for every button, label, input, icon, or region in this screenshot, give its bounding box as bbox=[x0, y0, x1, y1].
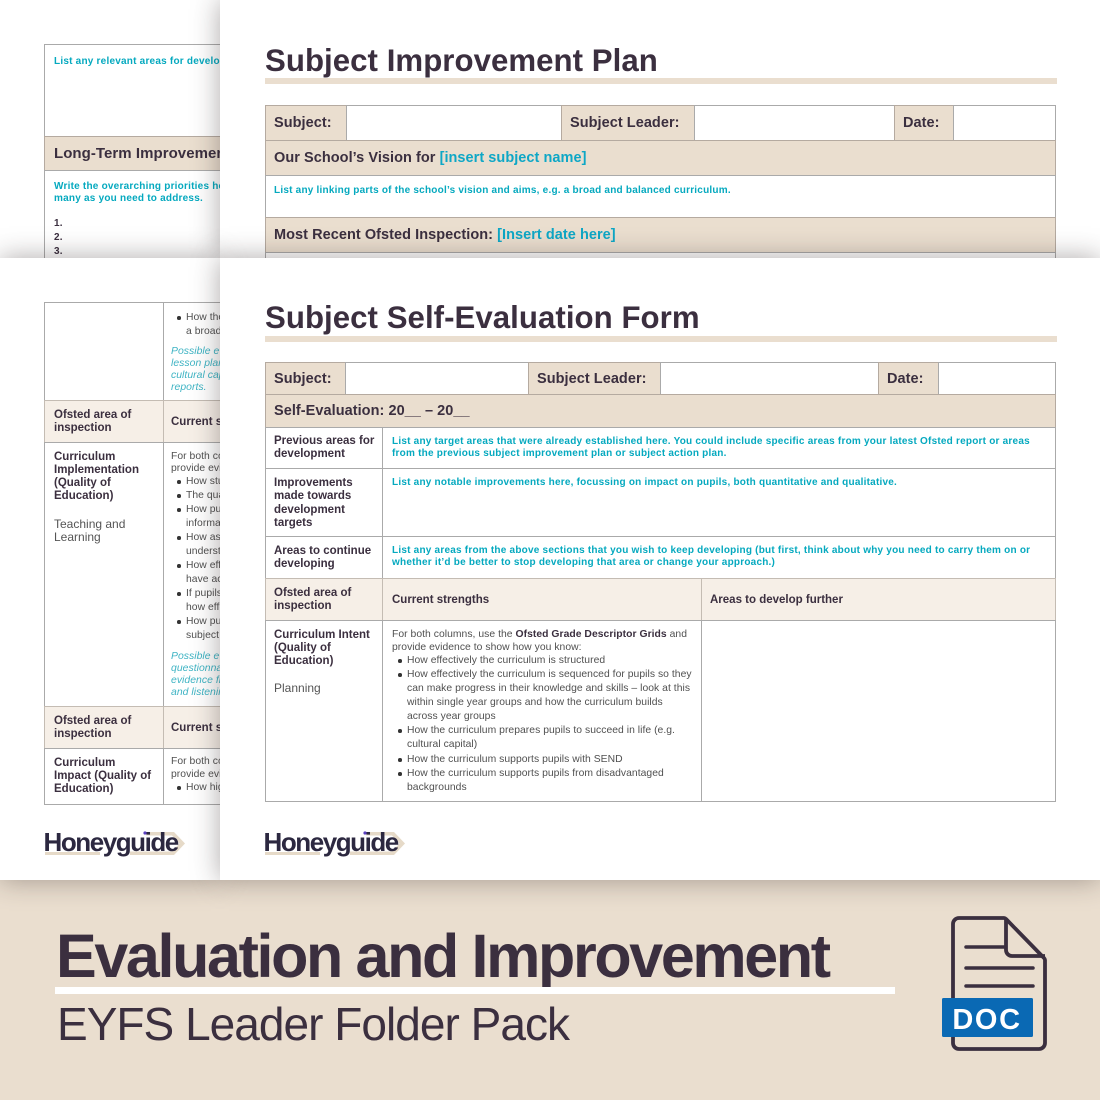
possible evidence note bbox=[171, 651, 220, 698]
guidance: curriculum intent: within single year groups and how the curriculum builds bbox=[407, 697, 663, 708]
title: Subject Self-Evaluation Form: Subject Self-Evaluation Form bbox=[265, 300, 700, 335]
field: Date: Date: bbox=[887, 371, 924, 387]
row: Curriculum Impact: Impact (Quality of bbox=[54, 770, 151, 782]
field: Subject Leader blank bbox=[694, 105, 895, 141]
field: Date blank bbox=[953, 105, 1056, 141]
row 1 content cell bbox=[163, 302, 463, 401]
header: Areas to develop further bbox=[701, 578, 1056, 621]
header: Current strengths (2) bbox=[163, 706, 463, 749]
header: Ofsted area of inspection (2): inspection bbox=[54, 728, 112, 740]
possible evidence note bbox=[171, 346, 220, 393]
icon: DOC file bbox=[942, 916, 1047, 1051]
priorities cell: many as you need to address. bbox=[54, 193, 203, 204]
panel: back page, improvement plan (top left) bbox=[0, 0, 300, 258]
header: Ofsted area of inspection (2) bbox=[44, 706, 164, 749]
panel: back page, self-evaluation continuation (left) bbox=[0, 258, 220, 880]
row: Curriculum Impact: Curriculum bbox=[54, 757, 115, 769]
guidance: curriculum intent: provide evidence to show how you know: bbox=[392, 642, 582, 653]
panel: front page, Subject Self-Evaluation Form bbox=[220, 258, 1100, 880]
header: Ofsted area of inspection: Ofsted area of bbox=[54, 409, 131, 421]
guidance: curriculum intent bbox=[382, 620, 702, 802]
field: Date: Date: bbox=[903, 115, 940, 131]
row: Curriculum Impact: Education) bbox=[54, 783, 113, 795]
label: Curriculum Intent: (Quality of bbox=[274, 642, 331, 654]
row: Self-Evaluation years bbox=[265, 394, 1056, 428]
heading row: Long-Term Improvement: Long-Term Improvement Priorities bbox=[54, 145, 300, 162]
row: Curriculum Implementation: Implementation bbox=[54, 464, 139, 476]
vision guidance text: List any linking parts of the school’s vision and aims, e.g. a broad and balanced curriculum. bbox=[274, 185, 731, 196]
field: Date bbox=[878, 362, 939, 395]
guidance: curriculum intent: For both columns, use the Ofsted Grade Descriptor Grids and bbox=[392, 629, 687, 640]
field: Subject Leader bbox=[528, 362, 661, 395]
implementation guidance: subject bbox=[186, 630, 219, 641]
guidance: improvements bbox=[382, 468, 1056, 537]
guidance: areas to continue: whether it’d be better to stop developing that area or change your approach.) bbox=[392, 557, 775, 568]
guidance: curriculum intent: cultural capital) bbox=[407, 739, 477, 750]
guidance: curriculum intent: How the curriculum supports pupils with SEND bbox=[407, 754, 623, 765]
title: Subject Improvement Plan: Subject Improvement Plan bbox=[265, 43, 658, 78]
guidance: curriculum intent: backgrounds bbox=[407, 782, 467, 793]
row: Self-Evaluation years: Self-Evaluation: 20__ – 20__ bbox=[274, 403, 470, 419]
target areas cell bbox=[44, 44, 344, 137]
row: Curriculum Implementation: Learning bbox=[54, 530, 101, 544]
label: Curriculum Intent bbox=[265, 620, 383, 802]
title underline bbox=[265, 78, 1057, 84]
guidance: curriculum intent: can make progress in their knowledge and skills – look at this bbox=[407, 683, 690, 694]
label: Areas to continue developing bbox=[265, 536, 383, 579]
label: Improvements made bbox=[265, 468, 383, 537]
row: Our School's Vision bbox=[265, 140, 1056, 176]
icon: DOC file: DOC bbox=[952, 1004, 1022, 1036]
label: Areas to continue developing: Areas to continue bbox=[274, 545, 371, 557]
heading: Evaluation and Improvement: Evaluation and Improvement bbox=[56, 922, 829, 990]
header: Ofsted area of inspection (2): Ofsted area of bbox=[54, 715, 131, 727]
label: Previous areas for development: development bbox=[274, 448, 345, 460]
label: Curriculum Intent: Curriculum Intent bbox=[274, 629, 370, 641]
subheading: EYFS Leader Folder Pack: EYFS Leader Folder Pack bbox=[57, 998, 569, 1050]
title underline bbox=[265, 336, 1057, 342]
row: Most Recent Ofsted Inspection bbox=[265, 217, 1056, 253]
label: Improvements made: targets bbox=[274, 517, 312, 529]
numbered list: 2. bbox=[54, 232, 63, 243]
label: Curriculum Intent: Education) bbox=[274, 655, 333, 667]
row: Curriculum Implementation: (Quality of bbox=[54, 477, 111, 489]
label: Previous areas for development bbox=[265, 427, 383, 469]
field: Subject Leader blank bbox=[660, 362, 879, 395]
row: Curriculum Implementation: Teaching and bbox=[54, 517, 125, 531]
heading row: Long-Term Improvement bbox=[44, 136, 344, 171]
guidance: curriculum intent: How the curriculum prepares pupils to succeed in life (e.g. bbox=[407, 725, 675, 736]
header: Current strengths: Current strengths bbox=[392, 594, 489, 606]
guidance: areas to continue bbox=[382, 536, 1056, 579]
possible evidence note: reports. bbox=[171, 382, 207, 393]
guidance: previous areas: from the previous subject improvement plan or subject action plan. bbox=[392, 448, 727, 459]
blank row under inspection heading bbox=[265, 252, 1056, 282]
logo: Honeyguide: Honeyguide bbox=[44, 827, 179, 857]
row: Our School's Vision: Our School’s Vision for [insert subject name] bbox=[274, 150, 586, 166]
header: Areas to develop further: Areas to develop further bbox=[710, 594, 843, 606]
field: Subject: Subject: bbox=[274, 115, 332, 131]
label: Improvements made: Improvements bbox=[274, 477, 353, 489]
header: Ofsted area of inspection: inspection bbox=[54, 422, 112, 434]
header: Ofsted area of inspection: Ofsted area of bbox=[274, 587, 351, 599]
white divider bar bbox=[55, 987, 895, 994]
label: Previous areas for development: Previous areas for bbox=[274, 435, 374, 447]
field: Subject bbox=[265, 105, 347, 141]
guidance: areas to continue: List any areas from the above sections that you wish to keep developing (but first, think about why you need to carry them on or bbox=[392, 545, 1030, 556]
priorities cell: Write the overarching priorities here, listing as bbox=[54, 181, 286, 192]
row: Curriculum Implementation: Curriculum bbox=[54, 451, 115, 463]
guidance: curriculum intent: How the curriculum supports pupils from disadvantaged bbox=[407, 768, 664, 779]
field: Date blank bbox=[938, 362, 1056, 395]
row: Most Recent Ofsted Inspection: Most Recent Ofsted Inspection: [Insert date here] bbox=[274, 227, 616, 243]
vision guidance text bbox=[265, 175, 1056, 218]
field: Subject Leader: Subject Leader: bbox=[570, 115, 680, 131]
field: Subject bbox=[265, 362, 346, 395]
logo: Honeyguide: Honeyguide bbox=[264, 827, 399, 857]
guidance: previous areas: List any target areas that were already established here. You could include specific areas from your latest Ofsted report or areas bbox=[392, 436, 1030, 447]
label: Areas to continue developing: developing bbox=[274, 558, 335, 570]
guidance: previous areas bbox=[382, 427, 1056, 469]
field: Subject Leader: Subject Leader: bbox=[537, 371, 647, 387]
guidance: curriculum intent: How effectively the curriculum is sequenced for pupils so they bbox=[407, 669, 692, 680]
header: Ofsted area of inspection bbox=[44, 400, 164, 443]
header: Current strengths bbox=[382, 578, 702, 621]
header: Current strengths bbox=[163, 400, 463, 443]
row 1 label cell bbox=[44, 302, 164, 401]
header: Ofsted area of inspection bbox=[265, 578, 383, 621]
panel: front page, Subject Improvement Plan bbox=[220, 0, 1100, 258]
guidance: improvements: List any notable improvements here, focussing on impact on pupils, both quantitative and qualitative. bbox=[392, 477, 897, 488]
field: Subject Leader bbox=[561, 105, 695, 141]
label: Improvements made: made towards bbox=[274, 490, 351, 502]
field: Date bbox=[894, 105, 954, 141]
implementation guidance bbox=[163, 442, 463, 707]
field: Subject: Subject: bbox=[274, 371, 332, 387]
blank cell: areas to develop further bbox=[701, 620, 1056, 802]
numbered list: 3. bbox=[54, 246, 63, 257]
label: Curriculum Intent: Planning bbox=[274, 681, 321, 695]
impact guidance bbox=[163, 748, 463, 805]
row: Curriculum Impact bbox=[44, 748, 164, 805]
guidance: curriculum intent: How effectively the curriculum is structured bbox=[407, 655, 605, 666]
numbered list: 1. bbox=[54, 218, 63, 229]
header: Ofsted area of inspection: inspection bbox=[274, 600, 332, 612]
numbered list bbox=[54, 218, 63, 257]
guidance: curriculum intent: across year groups bbox=[407, 711, 496, 722]
field: Subject blank bbox=[346, 105, 562, 141]
panel: beige footer band bbox=[0, 880, 1100, 1100]
row: Curriculum Implementation: Education) bbox=[54, 490, 113, 502]
field: Subject blank bbox=[345, 362, 529, 395]
label: Improvements made: development bbox=[274, 504, 345, 516]
priorities cell bbox=[44, 170, 344, 270]
target areas cell: List any relevant areas for development here. bbox=[54, 56, 279, 67]
row: Curriculum Implementation bbox=[44, 442, 164, 707]
